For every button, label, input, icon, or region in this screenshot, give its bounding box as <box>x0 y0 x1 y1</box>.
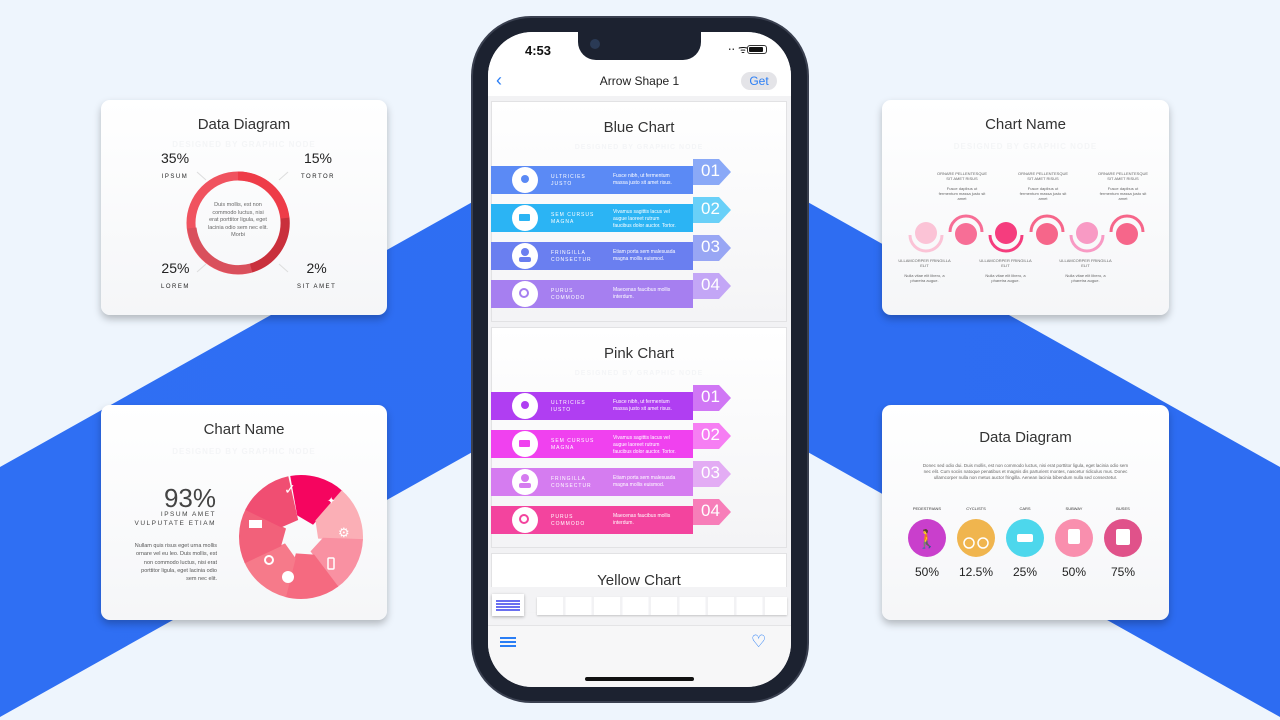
transport stats: BUSES <box>1116 506 1130 511</box>
shutter chart: ✦ <box>327 496 335 507</box>
card: data diagram donut: LOREM <box>161 284 190 290</box>
panel: pink chart: PURUS <box>551 514 574 520</box>
panel: blue chart: SEM CURSUS <box>551 212 594 218</box>
panel: pink chart: Etiam porta sem malesuada <box>613 475 675 481</box>
panel: blue chart: COMMODO <box>551 295 585 301</box>
panel: pink chart: faucibus dolor auctor. Tortor. <box>613 449 676 455</box>
nav bar: ‹ <box>496 70 502 90</box>
card: chart name timeline: ULLAMCORPER FRINGILLA ELIT <box>979 258 1032 268</box>
transport stats: 25% <box>1013 565 1037 579</box>
card: data diagram donut: 15% <box>304 150 332 166</box>
title: Chart Name <box>204 421 284 438</box>
card: chart name timeline: ORNARE PELLENTESQUE SIT AMET RISUS <box>1018 171 1068 181</box>
card: chart name shutter <box>101 405 387 620</box>
panel: blue chart: 03 <box>701 237 720 256</box>
status bar: Get <box>749 74 769 88</box>
panel: pink chart: Vivamus sagittis lacus vel <box>613 435 670 441</box>
big stat: IPSUM AMET <box>161 511 216 518</box>
card: data diagram donut: TORTOR <box>301 174 335 180</box>
panel: pink chart: FRINGILLA <box>551 476 586 482</box>
panel: blue chart: MAGNA <box>551 219 574 225</box>
screen <box>488 32 791 687</box>
panel: blue chart: FRINGILLA <box>551 250 586 256</box>
big stat: VULPUTATE ETIAM <box>134 520 216 527</box>
panel: pink chart: ULTRICIES <box>551 400 586 406</box>
transport stats: SUBWAY <box>1066 506 1083 511</box>
top captions: ORNARE PELLENTESQUE SIT AMET RISUS <box>937 171 987 181</box>
panel: blue chart: PURUS <box>551 288 574 294</box>
status bar: ⋅⋅ ᯤ <box>728 44 748 56</box>
shutter chart: ⚙ <box>338 525 350 540</box>
donut chart <box>186 172 290 274</box>
panel: blue chart: JUSTO <box>551 181 572 187</box>
bottom captions <box>898 258 951 283</box>
panel: blue chart: Blue Chart <box>604 119 674 136</box>
card: data diagram donut: 25% <box>161 260 189 276</box>
panel: blue chart: magna mollis euismod. <box>613 256 664 262</box>
shutter chart: ✓ <box>284 481 296 497</box>
panel: blue chart: 01 <box>701 161 720 180</box>
center text: Duis mollis, est non commodo luctus, nisi erat porttitor ligula, eget lacinia odio sem nec elit. Morbi <box>208 202 268 238</box>
bottom captions: ULLAMCORPER FRINGILLA ELIT <box>898 258 951 268</box>
panel: pink chart: COMMODO <box>551 521 585 527</box>
card: chart name timeline: Nulla vitae elit libero, a pharetra augue. <box>985 273 1026 283</box>
panel: pink chart: augue laoreet rutrum <box>613 442 659 448</box>
card: data diagram donut: DESIGNED BY GRAPHIC NODE <box>172 140 316 149</box>
paragraph: Nullam quis risus eget urna mollis ornare vel eu leo. Duis mollis, est non commodo luctus, nisi erat porttitor ligula, eget lacinia odio sem nec elit. <box>135 543 217 582</box>
card: chart name timeline: ULLAMCORPER FRINGILLA ELIT <box>1059 258 1112 268</box>
transport stats: CYCLISTS <box>966 506 986 511</box>
panel: pink chart: DESIGNED BY GRAPHIC NODE <box>575 370 703 377</box>
stat labels: 35% <box>161 150 189 166</box>
transport stats: 50% <box>915 565 939 579</box>
panel: blue chart: Etiam porta sem malesuada <box>613 249 675 255</box>
transport stats: 🚶 <box>916 528 938 549</box>
panel: blue chart: Fusce nibh, ut fermentum <box>613 173 670 179</box>
panel: pink chart: 03 <box>701 463 720 482</box>
panel: pink chart: interdum. <box>613 520 634 526</box>
transport stats: 75% <box>1111 565 1135 579</box>
title: Data Diagram <box>979 429 1072 446</box>
bottom toolbar: ♡ <box>751 632 766 651</box>
stat labels: IPSUM <box>162 174 188 180</box>
panel: blue chart <box>491 101 787 322</box>
transport stats: CARS <box>1019 506 1031 511</box>
panel: pink chart: Fusce nibh, ut fermentum <box>613 399 670 405</box>
paragraph: Donec sed odio dui. Duis mollis, est non commodo luctus, nisi erat porttitor ligula, eget lacinia odio sem nec elit. Cum sociis natoque penatibus et magnis dis parturient montes, nascetur ridiculus mus. Donec ullamcorper nulla non metus auctor fringilla. Aenean lacinia bibendum nulla sed consectetur. <box>923 463 1128 480</box>
panel: blue chart: CONSECTUR <box>551 257 592 263</box>
card: data diagram donut: SIT AMET <box>297 284 336 290</box>
panel: blue chart: 02 <box>701 199 720 218</box>
stat labels <box>161 150 189 180</box>
card: chart name timeline: Nulla vitae elit libero, a pharetra augue. <box>1065 273 1106 283</box>
card: chart name shutter: DESIGNED BY GRAPHIC NODE <box>172 447 316 456</box>
top captions: Fusce dapibus ut fermentum massa justo sit amet <box>939 186 985 201</box>
thumbnail strip <box>488 587 791 625</box>
notch <box>578 32 701 60</box>
status bar: 4:53 <box>525 43 551 58</box>
card: chart name timeline: Fusce dapibus ut fermentum massa justo sit amet <box>1020 186 1066 201</box>
shutter chart <box>239 475 363 599</box>
panel: blue chart: augue laoreet rutrum <box>613 216 659 222</box>
panel: pink chart: SEM CURSUS <box>551 438 594 444</box>
bottom toolbar <box>488 625 791 687</box>
card: chart name timeline: DESIGNED BY GRAPHIC NODE <box>954 142 1097 151</box>
circle timeline <box>908 214 1144 252</box>
phone <box>473 18 807 701</box>
transport stats: PEDESTRIANS <box>913 506 941 511</box>
transport stats <box>908 506 1142 579</box>
panel: pink chart: Maecenas faucibus mollis <box>613 513 671 519</box>
panel: pink chart: IUSTO <box>551 407 571 413</box>
panel: pink chart: massa justo sit amet risus. <box>613 406 672 412</box>
panel: pink chart: MAGNA <box>551 445 574 451</box>
card: chart name timeline <box>882 100 1169 315</box>
panel: pink chart: 02 <box>701 425 720 444</box>
card: data diagram donut: 2% <box>306 260 327 276</box>
panel: blue chart: ULTRICIES <box>551 174 586 180</box>
panel: blue chart: interdum. <box>613 294 634 300</box>
card: data diagram donut <box>101 100 387 315</box>
panel: pink chart: magna mollis euismod. <box>613 482 664 488</box>
status bar <box>488 32 791 96</box>
panel: blue chart: 04 <box>701 275 720 294</box>
card: chart name timeline: Fusce dapibus ut fermentum massa justo sit amet <box>1100 186 1146 201</box>
panel: pink chart: CONSECTUR <box>551 483 592 489</box>
big stat <box>134 483 216 527</box>
card: chart name timeline: ORNARE PELLENTESQUE SIT AMET RISUS <box>1098 171 1148 181</box>
title: Chart Name <box>985 116 1066 133</box>
panel: pink chart: 01 <box>701 387 720 406</box>
top captions <box>937 171 987 201</box>
panel: blue chart: massa justo sit amet risus. <box>613 180 672 186</box>
status bar: Arrow Shape 1 <box>600 74 679 88</box>
big stat: 93% <box>164 483 216 513</box>
card: data diagram transport <box>882 405 1169 620</box>
panel: blue chart: DESIGNED BY GRAPHIC NODE <box>575 144 703 151</box>
transport stats: 50% <box>1062 565 1086 579</box>
bottom captions: Nulla vitae elit libero, a pharetra augue. <box>904 273 945 283</box>
panel: yellow chart <box>491 553 787 613</box>
panel: pink chart <box>491 327 787 548</box>
panel: pink chart: 04 <box>701 501 720 520</box>
transport stats: 12.5% <box>959 565 993 579</box>
panel: blue chart: Vivamus sagittis lacus vel <box>613 209 670 215</box>
title: Data Diagram <box>198 116 290 133</box>
panel: yellow chart: Yellow Chart <box>597 572 681 589</box>
panel: pink chart: Pink Chart <box>604 345 674 362</box>
panel: blue chart: faucibus dolor auctor. Tortor. <box>613 223 676 229</box>
panel: blue chart: Maecenas faucibus mollis <box>613 287 671 293</box>
